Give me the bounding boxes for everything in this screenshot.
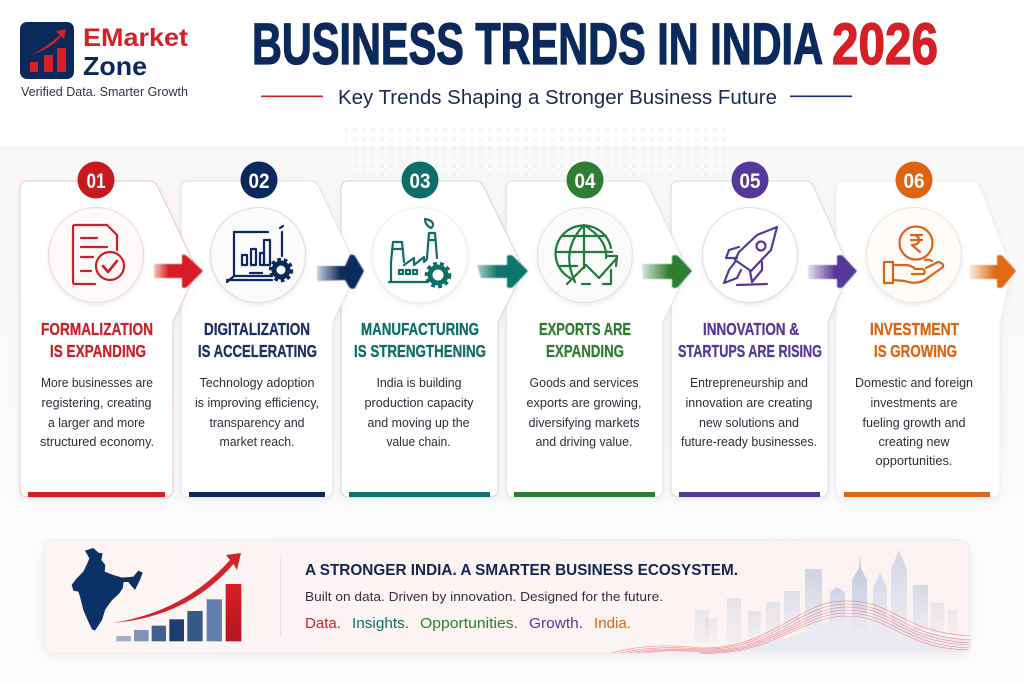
- illustration: red wave lines: [612, 601, 970, 653]
- text: formalization body: structured economy.: [40, 435, 154, 449]
- panel: card 4 exports: [506, 181, 688, 497]
- text: digitalization body: Technology adoption: [200, 376, 315, 390]
- text: investment body: investments are: [870, 396, 958, 410]
- heading: innovation: INNOVATION &: [703, 319, 799, 339]
- heading: manufacturing: MANUFACTURING: [361, 319, 479, 339]
- number badge 04: [566, 162, 604, 198]
- title: 2026: [832, 12, 938, 77]
- logo tagline: Verified Data. Smarter Growth: [21, 84, 188, 99]
- text: innovation body: new solutions and: [699, 416, 799, 430]
- illustration: map of India: [72, 548, 143, 631]
- number badge 03: [402, 162, 438, 198]
- text: innovation body: future-ready businesses.: [681, 435, 817, 449]
- heading: exports: EXPORTS ARE: [539, 319, 631, 339]
- heading: digitalization: DIGITALIZATION: [204, 319, 310, 339]
- number badge 05: [732, 162, 768, 198]
- arrow 2: [317, 255, 364, 289]
- banner keywords: [305, 616, 631, 632]
- logo: Zone: [83, 51, 147, 81]
- heading: manufacturing: IS STRENGTHENING: [354, 341, 486, 361]
- number badge 01: [78, 162, 114, 198]
- text: digitalization body: is improving efficiency,: [195, 396, 319, 410]
- icon: document with check: [48, 208, 144, 302]
- panel: card 1 formalization: [20, 181, 197, 497]
- heading: digitalization: [198, 319, 317, 361]
- icon: rocket: [702, 208, 798, 302]
- text: investment body: fueling growth and: [862, 416, 966, 430]
- banner keywords: Growth.: [529, 616, 583, 632]
- number badge 01: 01: [86, 170, 106, 193]
- banner heading: A STRONGER INDIA. A SMARTER BUSINESS ECOSYSTEM.: [305, 562, 738, 579]
- heading: manufacturing: [354, 319, 486, 361]
- heading: exports: EXPANDING: [546, 341, 624, 361]
- heading: innovation: [678, 319, 822, 361]
- logo mark: [20, 22, 74, 79]
- text: manufacturing body: value chain.: [386, 435, 450, 449]
- banner keywords: Insights.: [352, 616, 409, 632]
- logo wordmark: EMarket: [83, 24, 189, 52]
- text: investment body: creating new: [878, 435, 950, 449]
- number badge 02: [240, 162, 278, 198]
- heading: formalization: IS EXPANDING: [50, 341, 146, 361]
- text: digitalization body: market reach.: [220, 435, 294, 449]
- text: innovation body: [681, 376, 817, 449]
- text: manufacturing body: [364, 376, 474, 449]
- arrow: growth curve: [112, 553, 241, 623]
- heading: innovation: STARTUPS ARE RISING: [678, 341, 822, 361]
- heading: digitalization: IS ACCELERATING: [198, 341, 317, 361]
- arrow 4: [642, 255, 692, 288]
- heading: investment: INVESTMENT: [870, 319, 959, 339]
- icon: laptop with chart and gear: [210, 208, 306, 302]
- text: digitalization body: transparency and: [210, 416, 305, 430]
- banner keywords: Data.: [305, 616, 341, 632]
- panel: bottom banner: [44, 540, 970, 653]
- text: exports body: and driving value.: [536, 435, 632, 449]
- arrow 6: [970, 255, 1016, 288]
- number badge 04: 04: [574, 170, 596, 193]
- heading: formalization: FORMALIZATION: [41, 319, 153, 339]
- icon: rupee hand: [866, 208, 962, 302]
- text: innovation body: Entrepreneurship and: [690, 376, 808, 390]
- heading: exports: [539, 319, 631, 361]
- arrow 1: [154, 255, 203, 288]
- text: investment body: Domestic and foreign: [855, 376, 973, 390]
- text: formalization body: a larger and more: [48, 416, 145, 430]
- text: exports body: diversifying markets: [528, 416, 640, 430]
- text: exports body: [526, 376, 642, 449]
- text: investment body: opportunities.: [876, 454, 952, 468]
- text: investment body: [855, 376, 973, 468]
- text: manufacturing body: production capacity: [364, 396, 474, 410]
- text: formalization body: registering, creating: [42, 396, 152, 410]
- text: digitalization body: [195, 376, 319, 449]
- arrow 5: [808, 255, 857, 288]
- heading: investment: [870, 319, 959, 361]
- heading: formalization: [41, 319, 153, 361]
- arrow 3: [477, 255, 528, 288]
- chart: growth bars: [116, 584, 241, 641]
- text: manufacturing body: and moving up the: [368, 416, 470, 430]
- panel: card 5 innovation: [671, 181, 850, 497]
- number badge 06: 06: [904, 170, 924, 193]
- icon: globe with growth arrow: [538, 208, 632, 302]
- illustration: skyline: [690, 550, 968, 652]
- number badge 05: 05: [740, 170, 761, 193]
- number badge 02: 02: [248, 170, 270, 193]
- banner keywords: Opportunities.: [420, 616, 518, 632]
- text: formalization body: [40, 376, 154, 449]
- panel: card 3 manufacturing: [341, 181, 524, 497]
- number badge 03: 03: [410, 170, 430, 193]
- panel: card 2 digitalization: [181, 181, 358, 497]
- text: exports body: exports are growing,: [526, 396, 642, 410]
- banner keywords: India.: [594, 616, 631, 632]
- text: manufacturing body: India is building: [376, 376, 462, 390]
- subtitle: Key Trends Shaping a Stronger Business Future: [338, 87, 777, 109]
- panel: card 6 investment: [836, 181, 1012, 497]
- banner subheading: Built on data. Driven by innovation. Designed for the future.: [305, 589, 663, 604]
- heading: investment: IS GROWING: [874, 341, 957, 361]
- text: exports body: Goods and services: [530, 376, 638, 390]
- icon: factory with gear: [372, 208, 468, 302]
- text: formalization body: More businesses are: [41, 376, 153, 390]
- number badge 06: [896, 162, 932, 198]
- logo: [20, 22, 189, 99]
- text: innovation body: innovation are creating: [686, 396, 813, 410]
